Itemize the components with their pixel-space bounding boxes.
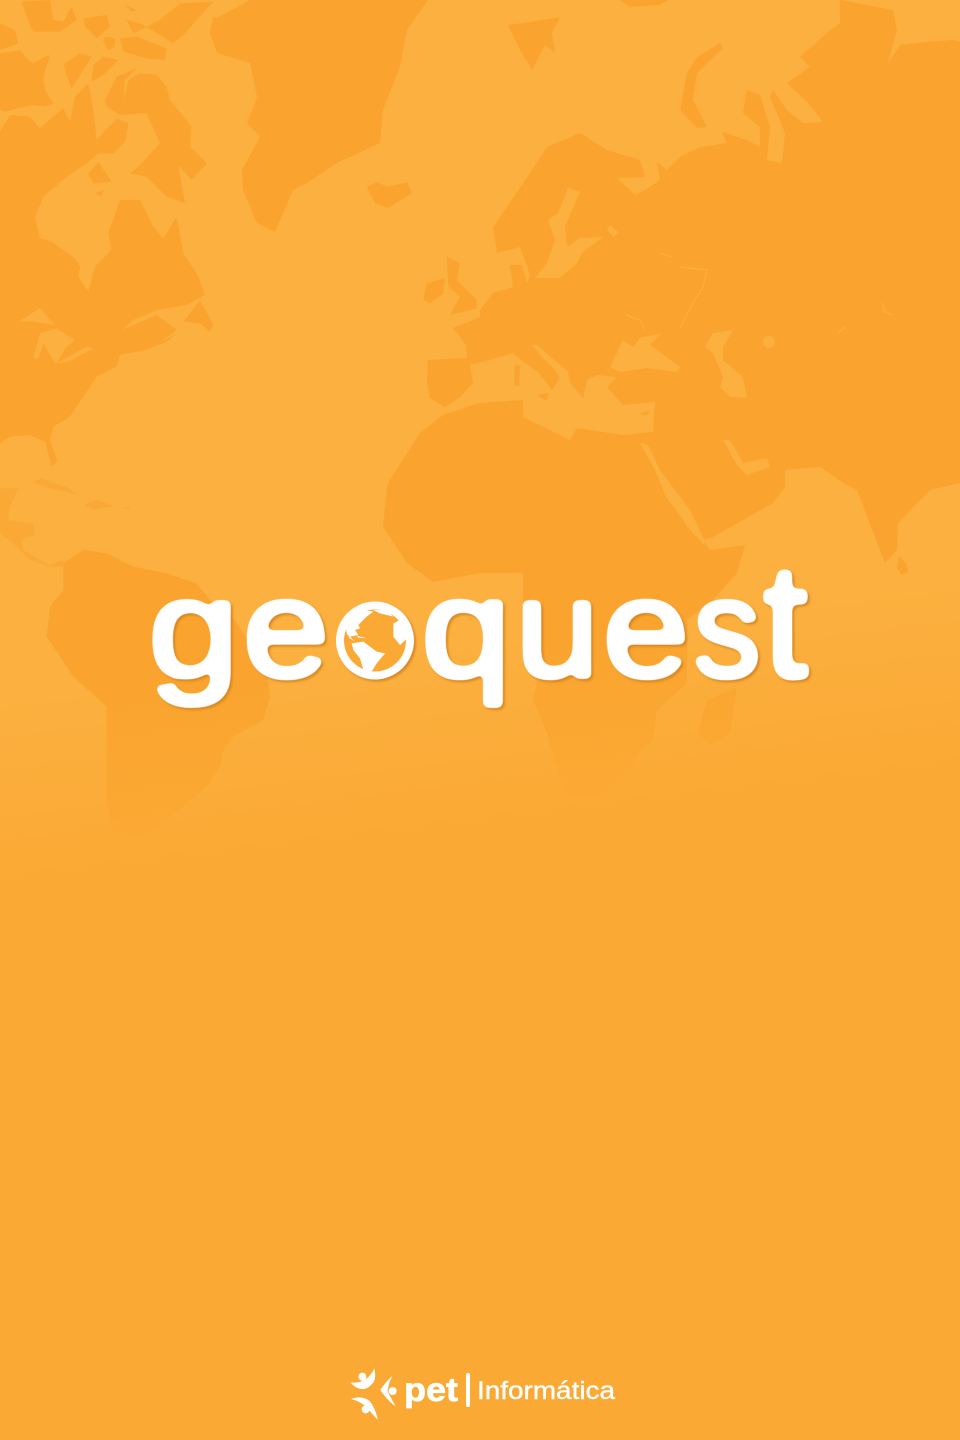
divider bar	[466, 1373, 470, 1407]
word: ge	[148, 551, 329, 707]
madagascar	[698, 687, 737, 745]
africa	[383, 400, 745, 797]
bottom fade overlay	[0, 500, 960, 1440]
word: quest: e	[603, 551, 689, 707]
mediterranean islands	[514, 365, 650, 416]
wordmark: pet: pet	[404, 1371, 458, 1408]
arctic russia islands	[508, 0, 723, 128]
wordmark: informatica: Informática	[477, 1377, 615, 1405]
word: quest: s	[693, 551, 761, 707]
south america	[47, 550, 270, 833]
caspian sea	[705, 330, 747, 398]
north america and arctic islands	[0, 0, 220, 467]
lake ladoga	[607, 225, 618, 237]
iceland	[367, 182, 412, 208]
british isles	[423, 257, 477, 315]
rivers and lakes	[626, 253, 892, 333]
red sea	[640, 443, 705, 546]
eurasia	[427, 0, 960, 563]
word: quest: q	[421, 549, 511, 706]
sri lanka	[897, 556, 908, 575]
persian gulf	[723, 440, 770, 475]
word: quest: t	[764, 531, 807, 711]
pet informatica footer logo	[350, 1368, 615, 1420]
word: ge: g	[148, 551, 239, 707]
central america and caribbean	[0, 478, 130, 567]
baltic sea	[535, 188, 603, 278]
geoquest logo	[148, 531, 807, 711]
aral sea	[763, 336, 775, 348]
mediterranean sea	[443, 345, 655, 440]
icon: three figures	[350, 1368, 397, 1420]
word: quest	[421, 531, 807, 711]
black sea	[610, 333, 680, 372]
word: ge: e	[243, 551, 329, 707]
icon: globe standing in for the letter o	[336, 602, 414, 680]
word: quest: u	[516, 550, 599, 706]
greenland	[210, 0, 428, 232]
